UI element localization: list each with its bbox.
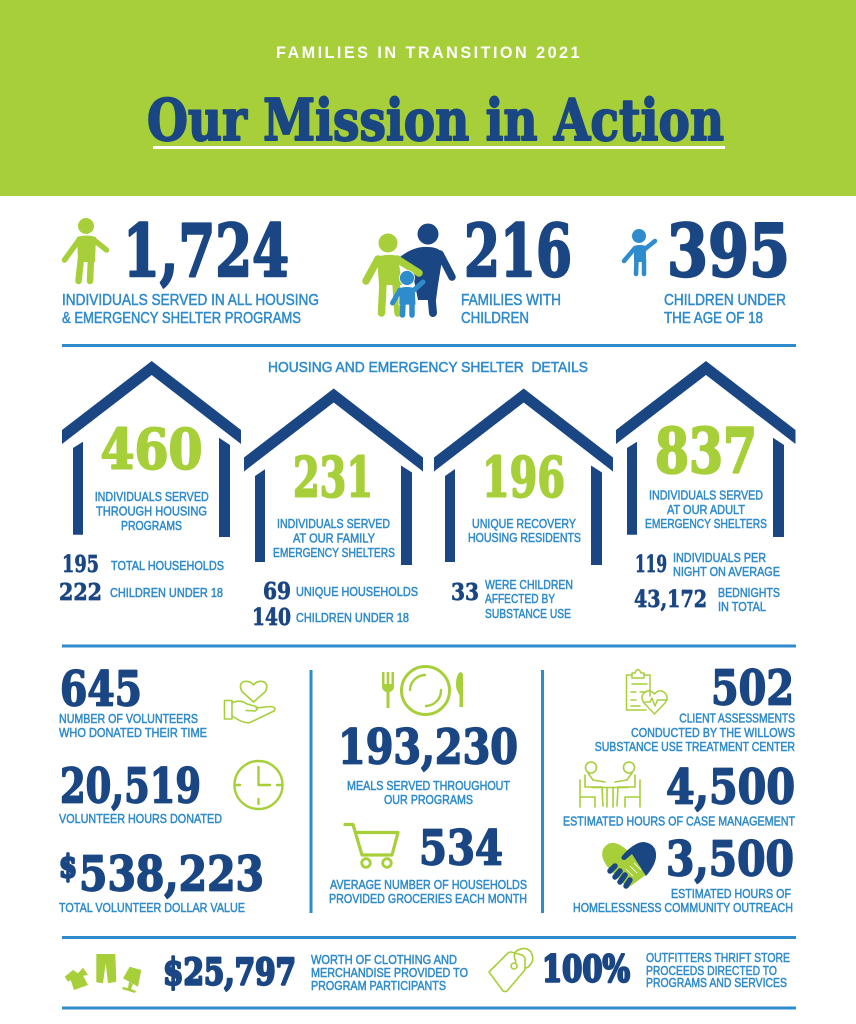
house panel: adult emergency shelters: BEDNIGHTS xyxy=(718,585,780,600)
stat strip: thrift store: PROCEEDS DIRECTED TO xyxy=(646,963,777,978)
stat: individuals served: INDIVIDUALS SERVED IN ALL HOUSING xyxy=(62,292,319,309)
column: services: ESTIMATED HOURS OF xyxy=(671,886,791,901)
house panel: recovery housing: SUBSTANCE USE xyxy=(485,606,571,621)
icon: plate and cutlery xyxy=(382,666,463,714)
icon: child waving xyxy=(624,229,655,274)
house panel: family emergency shelters: 69 xyxy=(263,578,291,605)
stat: children under 18: CHILDREN UNDER xyxy=(664,292,786,309)
stat strip: clothing: PROGRAM PARTICIPANTS xyxy=(311,978,446,993)
house panel: adult emergency shelters: 119 xyxy=(635,551,667,578)
house panel: housing programs: PROGRAMS xyxy=(121,518,182,533)
stat: individuals served xyxy=(62,208,319,327)
icon: clipboard with heart xyxy=(626,670,667,714)
house panel: housing programs: 195 xyxy=(62,551,99,578)
column: services xyxy=(563,660,795,915)
stat strip: clothing: WORTH OF CLOTHING AND xyxy=(311,952,457,967)
column: services: 502 xyxy=(711,660,794,716)
stat strip: thrift store xyxy=(489,948,790,992)
column: volunteers: VOLUNTEER HOURS DONATED xyxy=(59,811,222,826)
header banner xyxy=(0,0,856,196)
stat: families with children: CHILDREN xyxy=(461,310,529,327)
section heading: housing details: HOUSING AND EMERGENCY SHELTER DETAILS xyxy=(268,360,588,376)
column: meals and groceries: 193,230 xyxy=(338,720,518,776)
column: services: 3,500 xyxy=(666,832,794,888)
house panel: housing programs: CHILDREN UNDER 18 xyxy=(110,585,223,600)
column: meals and groceries: AVERAGE NUMBER OF HOUSEHOLDS xyxy=(330,877,527,892)
column: volunteers: 538,223 xyxy=(79,846,264,902)
house panel: adult emergency shelters: NIGHT ON AVERAGE xyxy=(673,564,780,579)
house panel: recovery housing: WERE CHILDREN xyxy=(485,577,573,592)
house panel: family emergency shelters: EMERGENCY SHELTERS xyxy=(273,545,395,560)
house panel: family emergency shelters xyxy=(244,388,423,631)
house panel: family emergency shelters: 140 xyxy=(252,604,291,631)
house panel: housing programs: THROUGH HOUSING xyxy=(96,504,207,519)
house panel: family emergency shelters: AT OUR FAMILY xyxy=(293,530,375,546)
stat: families with children: FAMILIES WITH xyxy=(461,292,561,309)
title underline xyxy=(153,146,725,149)
column: meals and groceries: MEALS SERVED THROUGHOUT xyxy=(347,778,510,793)
stat strip: thrift store: 100% xyxy=(542,948,630,990)
column: volunteers: 20,519 xyxy=(60,758,201,814)
stat: individuals served: 1,724 xyxy=(123,208,289,293)
house panel: housing programs xyxy=(59,361,241,606)
house panel: recovery housing: UNIQUE RECOVERY xyxy=(472,516,576,531)
house panel: housing programs: 460 xyxy=(100,416,202,482)
column: meals and groceries xyxy=(329,666,527,906)
stat strip: thrift store: OUTFITTERS THRIFT STORE xyxy=(646,950,790,965)
stat strip: clothing: MERCHANDISE PROVIDED TO xyxy=(311,965,468,980)
stat: families with children: 216 xyxy=(464,208,572,293)
house panel: family emergency shelters: 231 xyxy=(293,444,373,510)
column: services: 4,500 xyxy=(666,760,795,816)
house outline xyxy=(434,388,613,565)
house panel: family emergency shelters: CHILDREN UNDER 18 xyxy=(296,610,409,625)
column: meals and groceries: OUR PROGRAMS xyxy=(384,792,473,807)
icon: handshake heart xyxy=(602,842,656,888)
stat: children under 18: 395 xyxy=(667,208,790,293)
icon: meeting at table xyxy=(580,762,640,807)
house panel: family emergency shelters: INDIVIDUALS SERVED xyxy=(277,516,390,531)
stat: individuals served: & EMERGENCY SHELTER PROGRAMS xyxy=(62,310,301,327)
icon: hand holding heart xyxy=(224,681,275,723)
stat strip: clothing: $25,797 xyxy=(163,952,296,994)
icon: clock xyxy=(234,761,282,809)
house panel: housing programs: INDIVIDUALS SERVED xyxy=(95,489,209,504)
column: volunteers: WHO DONATED THEIR TIME xyxy=(59,725,207,740)
house panel: adult emergency shelters: 837 xyxy=(655,414,757,488)
icon: shirt, pants, lamp xyxy=(65,954,141,993)
stat: families with children xyxy=(366,208,572,327)
house panel: adult emergency shelters: INDIVIDUALS PER xyxy=(673,550,766,565)
house panel: housing programs: TOTAL HOUSEHOLDS xyxy=(111,558,224,573)
house panel: recovery housing: HOUSING RESIDENTS xyxy=(468,530,581,545)
house panel: adult emergency shelters: INDIVIDUALS SERVED xyxy=(649,488,763,503)
stat strip: thrift store: PROGRAMS AND SERVICES xyxy=(646,975,787,990)
house panel: recovery housing xyxy=(434,388,613,621)
column: services: CONDUCTED BY THE WILLOWS xyxy=(631,725,795,740)
stat strip: clothing xyxy=(65,952,468,994)
icon: price tag xyxy=(489,948,533,992)
house panel: adult emergency shelters: AT OUR ADULT xyxy=(667,502,745,517)
column: volunteers xyxy=(59,662,282,915)
house panel: family emergency shelters: UNIQUE HOUSEHOLDS xyxy=(296,584,418,599)
icon: family xyxy=(366,224,452,315)
column: meals and groceries: PROVIDED GROCERIES EACH MONTH xyxy=(329,891,527,906)
column: services: ESTIMATED HOURS OF CASE MANAGEMENT xyxy=(563,814,795,829)
house panel: adult emergency shelters xyxy=(616,361,796,614)
column: volunteers: TOTAL VOLUNTEER DOLLAR VALUE xyxy=(59,900,245,915)
house panel: housing programs: 222 xyxy=(59,579,102,606)
icon: shopping cart xyxy=(345,824,398,867)
column: volunteers: 645 xyxy=(60,662,142,718)
column: volunteers: $ xyxy=(59,849,77,885)
stat: children under 18 xyxy=(624,208,790,327)
column: meals and groceries: 534 xyxy=(419,820,503,876)
house outline xyxy=(62,361,241,537)
house panel: recovery housing: 33 xyxy=(451,579,479,606)
column: services: SUBSTANCE USE TREATMENT CENTER xyxy=(595,739,795,754)
stat: children under 18: THE AGE OF 18 xyxy=(664,310,763,327)
column: services: CLIENT ASSESSMENTS xyxy=(679,711,795,726)
house outline xyxy=(616,361,796,537)
main title: Our Mission in Action xyxy=(147,87,724,154)
icon: adult person xyxy=(64,218,106,281)
eyebrow heading: FAMILIES IN TRANSITION 2021 xyxy=(276,44,582,62)
house panel: recovery housing: 196 xyxy=(482,444,565,510)
house outline xyxy=(244,388,423,565)
house panel: adult emergency shelters: EMERGENCY SHELTERS xyxy=(645,516,767,531)
column: volunteers: NUMBER OF VOLUNTEERS xyxy=(59,711,198,726)
house panel: recovery housing: AFFECTED BY xyxy=(485,591,555,606)
house panel: adult emergency shelters: 43,172 xyxy=(634,586,707,613)
column: services: HOMELESSNESS COMMUNITY OUTREACH xyxy=(573,900,793,915)
house panel: adult emergency shelters: IN TOTAL xyxy=(718,599,766,614)
